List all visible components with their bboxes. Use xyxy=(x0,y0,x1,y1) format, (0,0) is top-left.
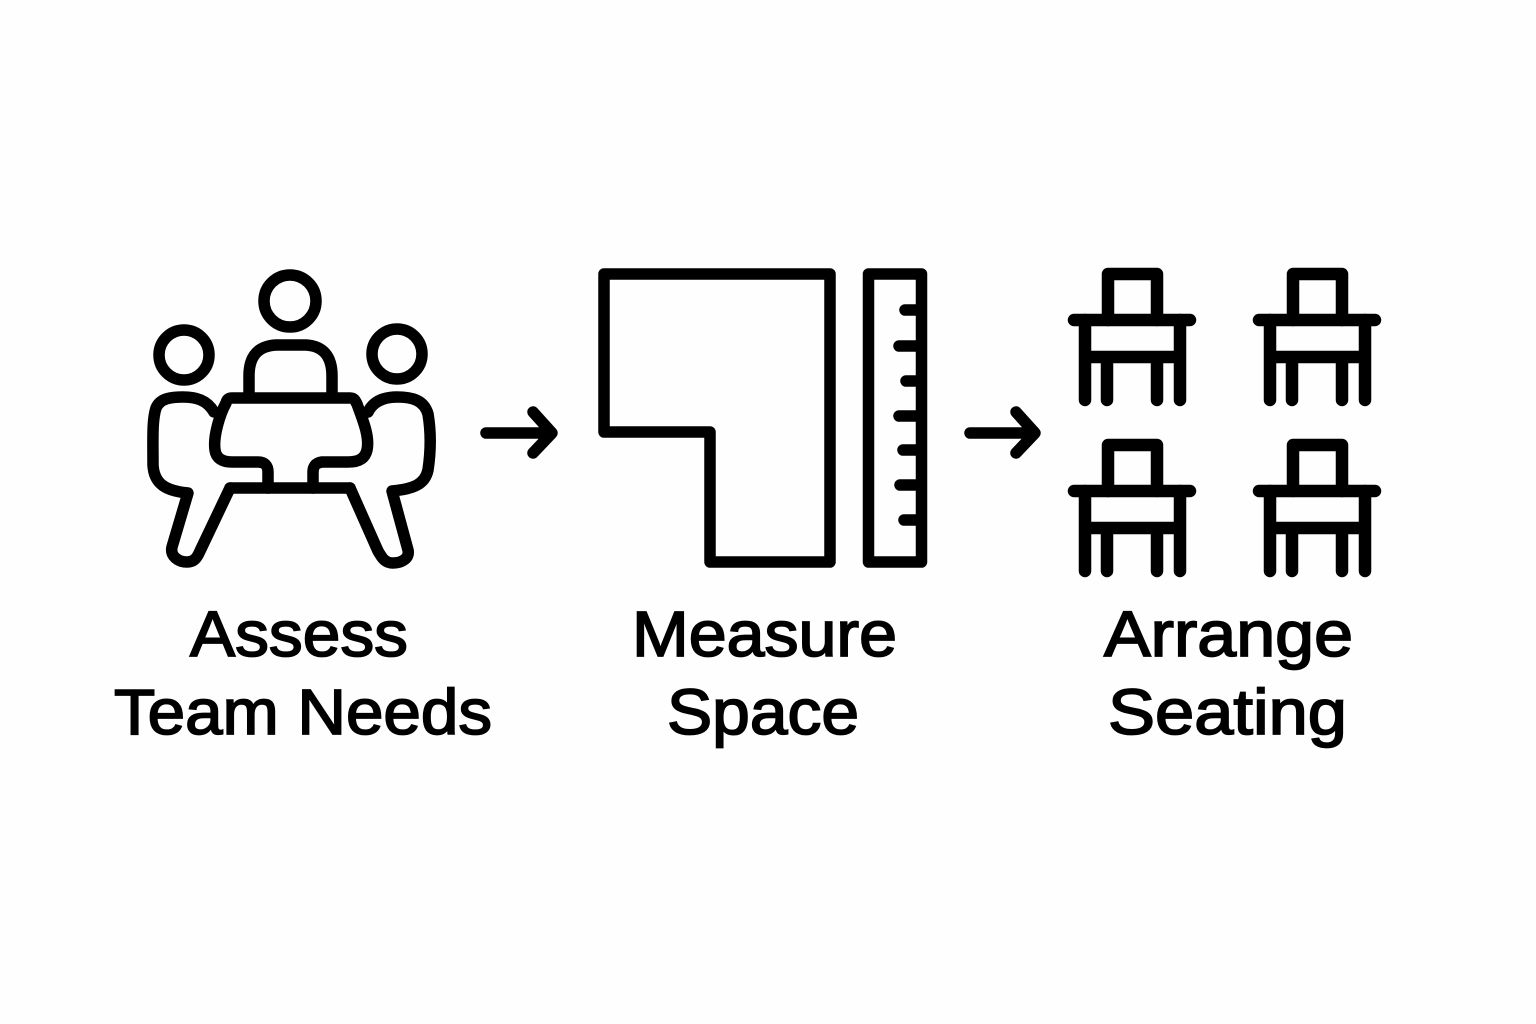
label: Arrange Seating: Seating xyxy=(1108,676,1347,748)
label: Measure Space: Space xyxy=(667,676,859,748)
label: Measure Space xyxy=(632,598,897,748)
step 1: assess team needs xyxy=(114,275,492,748)
label: Measure Space: Measure xyxy=(632,598,897,670)
label: Arrange Seating: Arrange xyxy=(1104,598,1353,670)
step 2: measure space xyxy=(604,274,922,748)
step 3: arrange seating xyxy=(1074,274,1375,748)
icon: ruler xyxy=(868,274,922,562)
label: Assess Team Needs xyxy=(114,598,492,748)
label: Arrange Seating xyxy=(1104,598,1353,748)
icon: L-shaped floor plan xyxy=(604,274,830,562)
label: Assess Team Needs: Assess xyxy=(190,598,408,670)
arrow: step 2 to step 3 xyxy=(970,412,1035,453)
arrow: step 1 to step 2 xyxy=(486,412,552,453)
icon: team around a table xyxy=(153,275,430,563)
label: Assess Team Needs: Team Needs xyxy=(114,676,492,748)
icon: four chairs xyxy=(1074,274,1375,571)
